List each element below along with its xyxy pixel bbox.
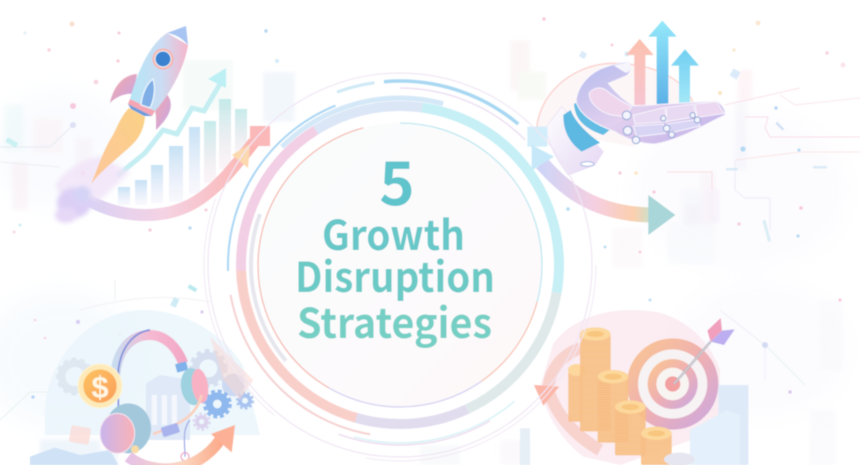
pink halo outline [537, 63, 693, 128]
rocket body [128, 26, 188, 116]
illustration: rocket and rising chart [55, 26, 270, 223]
pink halo behind the hand [537, 63, 693, 147]
illustration: headset with coin and gears [30, 310, 260, 465]
office building [30, 375, 190, 465]
white halo around the central circle [232, 97, 568, 433]
outer blue arcs [216, 81, 584, 449]
right ear cup [179, 367, 210, 407]
building [520, 385, 748, 465]
title [295, 136, 495, 350]
thick segmented ring [233, 98, 567, 432]
blue return arrow [527, 127, 554, 171]
dollar coin [78, 364, 122, 408]
title line: Strategies: Strategies [297, 290, 492, 350]
title line: Disruption: Disruption [295, 244, 495, 304]
smoke cloud [55, 156, 130, 223]
swoosh arrow to the right [542, 163, 675, 235]
title line: Growth: Growth [322, 202, 465, 262]
forearm cuff [545, 102, 612, 175]
orange curved arrow [128, 425, 235, 465]
arrow in target [674, 318, 735, 384]
puzzle piece [69, 425, 91, 445]
pale blue backdrop dome [45, 310, 260, 435]
robotic hand [576, 62, 725, 144]
curved swoosh arrow [88, 126, 270, 215]
left ear cup [100, 403, 151, 453]
pink circular backdrop [540, 310, 720, 465]
three upward arrows [626, 21, 699, 108]
rocket flame [91, 108, 145, 184]
rising zigzag arrow [117, 68, 226, 176]
headband [115, 335, 183, 378]
microphone boom [153, 395, 202, 461]
central disc [258, 123, 542, 407]
bar chart [118, 99, 247, 205]
curved return arrow [534, 348, 600, 450]
illustration: robotic hand holding growth arrows [527, 21, 725, 235]
archery target [627, 338, 718, 430]
central circular rings [204, 69, 596, 461]
gears [58, 337, 253, 430]
coin stacks [568, 327, 695, 465]
rocket fins [110, 74, 171, 130]
dollar coin: $ [91, 370, 109, 404]
hand joints [622, 111, 700, 144]
illustration: coin stacks and target with arrow [520, 310, 748, 465]
title number 5: 5 [379, 136, 415, 223]
